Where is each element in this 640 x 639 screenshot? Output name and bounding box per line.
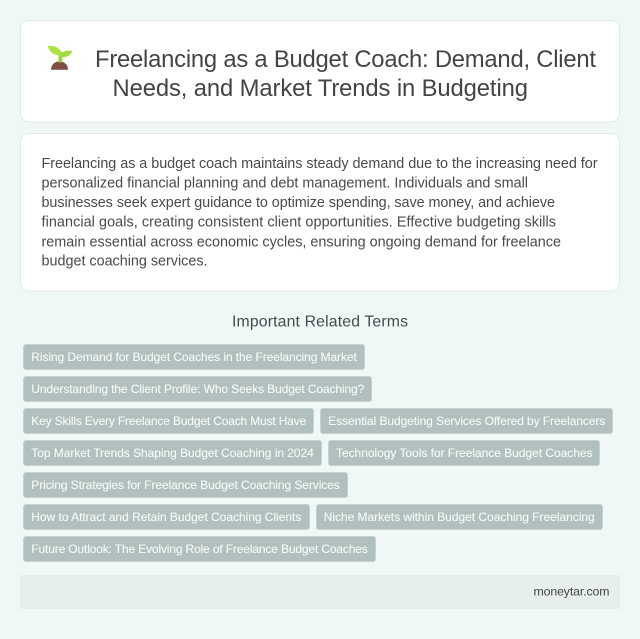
tag: client profile (24, 376, 372, 402)
tag: pricing strategies (24, 472, 348, 498)
tag: pricing strategies: Pricing Strategies for Freelance Budget Coaching Services (31, 478, 340, 492)
related terms tags (24, 344, 612, 562)
description text (42, 156, 598, 270)
tag: essential services (320, 408, 612, 434)
footer source text: moneytar.com (534, 585, 610, 599)
tag: key skills: Key Skills Every Freelance Budget Coach Must Have (31, 414, 307, 428)
description text: remain essential across economic cycles, ensuring ongoing demand for freelance (42, 234, 561, 250)
footer bar (20, 575, 620, 609)
description text: personalized financial planning and debt management. Individuals and small (42, 176, 528, 192)
tag: market trends: Top Market Trends Shaping Budget Coaching in 2024 (31, 446, 314, 460)
title (95, 46, 596, 102)
tag: rising demand: Rising Demand for Budget Coaches in the Freelancing Market (31, 350, 357, 364)
tag: future outlook: Future Outlook: The Evolving Role of Freelance Budget Coaches (31, 542, 368, 556)
description text: financial goals, creating consistent client opportunities. Effective budgeting skills (42, 215, 556, 231)
tag: technology tools (328, 440, 600, 466)
icon: sprout (48, 46, 72, 70)
tag: niche markets (316, 504, 602, 530)
tag: key skills (24, 408, 314, 434)
description text: Freelancing as a budget coach maintains steady demand due to the increasing need for (42, 156, 598, 172)
tag: niche markets: Niche Markets within Budget Coaching Freelancing (324, 510, 595, 524)
description text: businesses seek expert guidance to optimize spending, save money, and achieve (42, 195, 555, 211)
tag: essential services: Essential Budgeting Services Offered by Freelancers (328, 414, 605, 428)
title: Needs, and Market Trends in Budgeting (112, 75, 528, 102)
tag: client profile: Understanding the Client Profile: Who Seeks Budget Coaching? (31, 382, 365, 396)
heading: important related terms: Important Related Terms (232, 314, 408, 330)
tag: future outlook (24, 536, 376, 562)
description text: budget coaching services. (42, 254, 208, 270)
tag: attract clients: How to Attract and Retain Budget Coaching Clients (31, 510, 301, 524)
panel: header card (20, 20, 620, 122)
panel: description card (20, 134, 620, 291)
title: Freelancing as a Budget Coach: Demand, Client (95, 46, 596, 73)
tag: rising demand (24, 344, 364, 370)
tag: attract clients (24, 504, 310, 530)
tag: technology tools: Technology Tools for Freelance Budget Coaches (336, 446, 592, 460)
tag: market trends (24, 440, 322, 466)
